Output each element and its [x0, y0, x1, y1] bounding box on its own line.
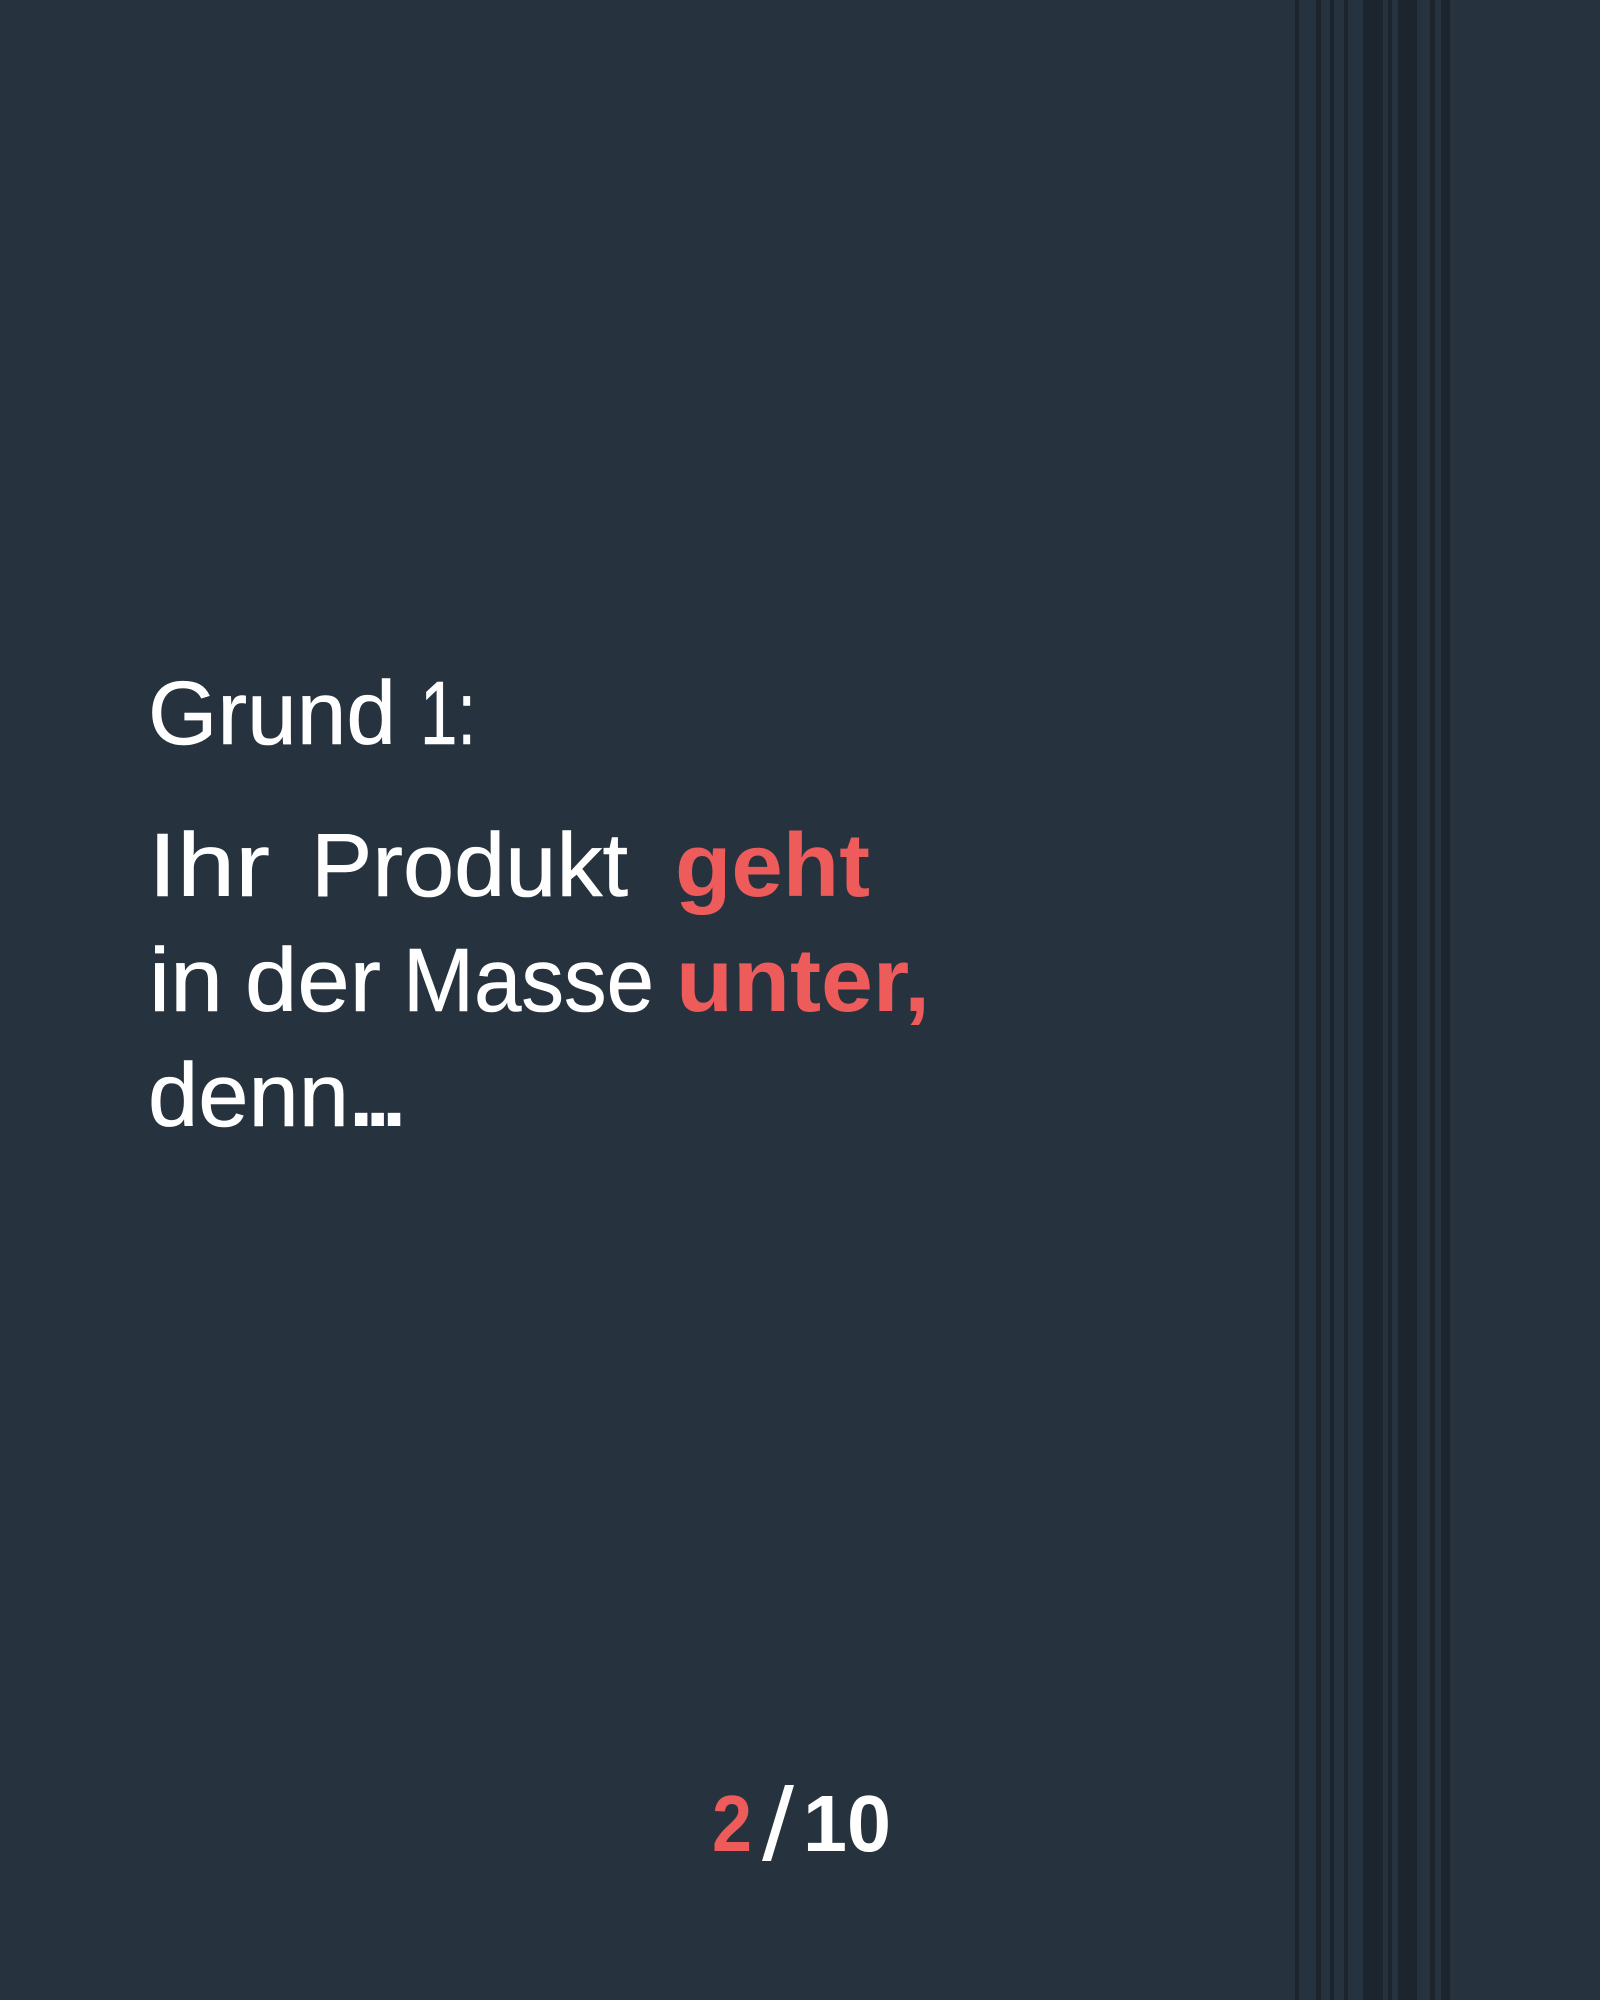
decorative vertical stripes — [1295, 0, 1450, 2000]
main statement text: ... — [349, 1046, 401, 1145]
main statement text: der — [245, 931, 381, 1031]
main statement text: Produkt — [311, 816, 628, 916]
main statement text: denn — [148, 1046, 349, 1146]
main statement text: in — [149, 931, 223, 1031]
main statement text: Masse — [403, 931, 654, 1031]
main statement text: Ihr — [148, 816, 270, 916]
main statement text: unter, — [676, 931, 930, 1031]
page number: 10 — [803, 1779, 891, 1868]
page number — [712, 1779, 891, 1868]
heading: Grund 1: 1: — [420, 664, 476, 764]
main statement text — [148, 816, 930, 1146]
main statement text: geht — [675, 816, 870, 916]
page number: 2 — [712, 1779, 752, 1868]
heading: Grund 1: Grund — [148, 664, 396, 764]
